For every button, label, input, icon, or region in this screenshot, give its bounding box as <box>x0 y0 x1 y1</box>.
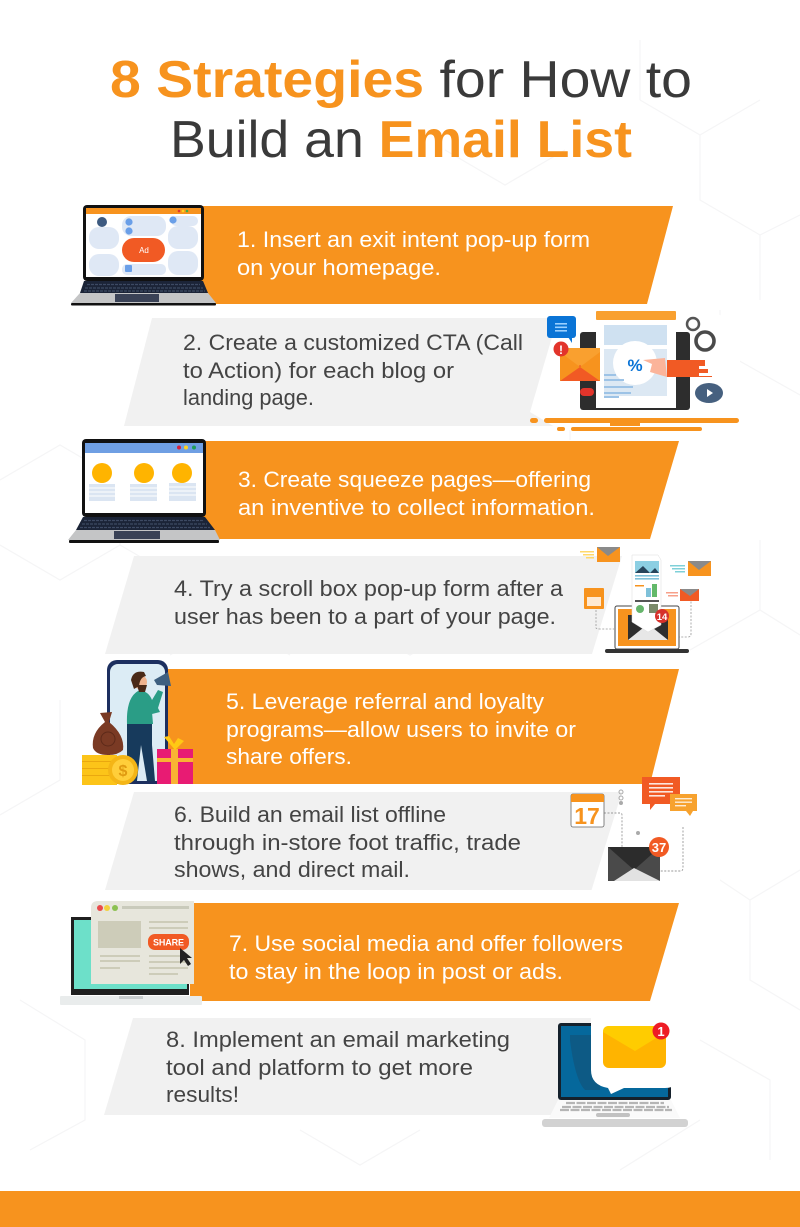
panel: strategy 8 <box>104 1018 592 1115</box>
icon: laptop with ad <box>71 205 216 306</box>
panel: strategy 2: 2. Create a customized CTA (Call <box>183 330 523 355</box>
title: 8 Strategies for How to <box>110 51 692 109</box>
panel: strategy 1: 1. Insert an exit intent pop-up form <box>237 227 590 252</box>
panel: strategy 1: on your homepage. <box>237 255 441 280</box>
panel: strategy 5: share offers. <box>226 744 352 769</box>
panel: strategy 6: shows, and direct mail. <box>174 857 410 882</box>
panel: strategy 7 <box>190 903 679 1001</box>
icon: tablet promo with envelope: ! <box>559 343 563 357</box>
icon: tablet promo with envelope: % <box>627 356 643 375</box>
icon: laptop squeeze page <box>68 439 220 543</box>
panel: strategy 8: 8. Implement an email marketing <box>166 1027 510 1052</box>
icon: calendar, chat bubbles and envelope: 37 <box>652 840 666 855</box>
panel: strategy 7: to stay in the loop in post or ads. <box>229 959 563 984</box>
panel: strategy 3: 3. Create squeeze pages—offering <box>238 467 591 492</box>
panel: strategy 4: user has been to a part of your page. <box>174 604 556 629</box>
icon: man with megaphone and rewards: $ <box>119 763 128 780</box>
title <box>110 51 692 169</box>
panel: strategy 7: 7. Use social media and offer followers <box>229 931 623 956</box>
panel: strategy 8: results! <box>166 1082 239 1107</box>
icon: newsletter envelope on laptop: 14 <box>657 612 668 623</box>
panel: strategy 1 <box>190 206 673 304</box>
icon: laptop with email notification <box>542 1012 688 1127</box>
panel: strategy 4: 4. Try a scroll box pop-up form after a <box>174 576 563 601</box>
panel: strategy 6: through in-store foot traffic, trade <box>174 830 521 855</box>
icon: laptop with ad: Ad <box>139 246 149 255</box>
icon: laptop with share button <box>60 901 202 1005</box>
panel: strategy 2: landing page. <box>183 385 314 410</box>
footer bar <box>0 1191 800 1227</box>
icon: calendar, chat bubbles and envelope: 17 <box>574 803 600 829</box>
panel: strategy 4 <box>105 556 622 654</box>
panel: strategy 5 <box>168 669 679 784</box>
title: Build an Email List <box>170 111 632 169</box>
icon: tablet promo with envelope <box>530 305 740 431</box>
panel: strategy 2 <box>124 318 590 426</box>
panel: strategy 2: to Action) for each blog or <box>183 358 455 383</box>
icon: calendar, chat bubbles and envelope <box>571 777 720 895</box>
panel: strategy 3 <box>200 441 679 539</box>
panel: strategy 8: tool and platform to get more <box>166 1055 473 1080</box>
icon: newsletter envelope on laptop <box>580 547 711 653</box>
panel: strategy 6: 6. Build an email list offline <box>174 802 446 827</box>
panel: strategy 6 <box>105 792 622 890</box>
panel: strategy 3: an inventive to collect information. <box>238 495 595 520</box>
icon: laptop with share button: SHARE <box>153 938 184 948</box>
panel: strategy 5: 5. Leverage referral and loyalty <box>226 689 545 714</box>
icon: laptop with email notification: 1 <box>657 1024 665 1039</box>
icon: man with megaphone and rewards <box>82 660 193 785</box>
panel: strategy 5: programs—allow users to invite or <box>226 717 577 742</box>
